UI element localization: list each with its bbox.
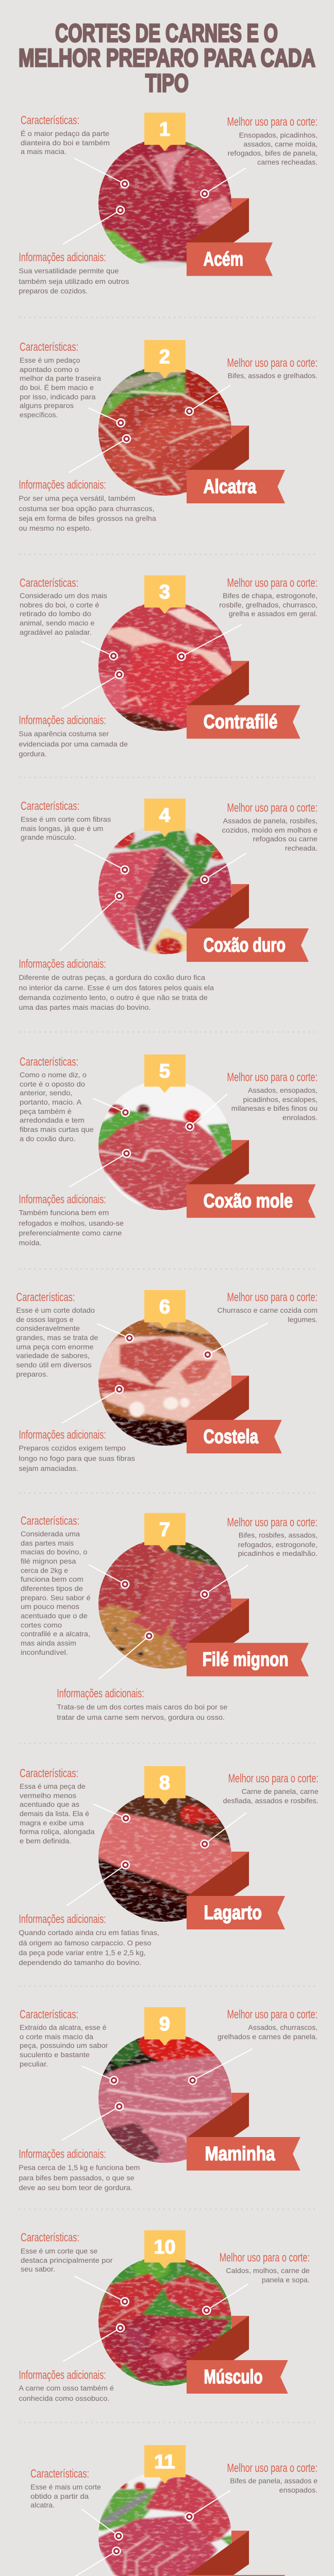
text: melhor uso [223, 1772, 319, 1805]
text: características: o corte mais macio da [20, 2032, 93, 2041]
text: melhor uso: Carne de panela, carne [242, 1787, 319, 1795]
ribbon: name: Costela [204, 1426, 259, 1448]
text: informações: Informações adicionais: [19, 957, 106, 971]
text: características: das partes mais [21, 1539, 74, 1547]
text: características: fibras mais curtas que [20, 1125, 94, 1133]
text: características: corte é o oposto do [20, 1080, 85, 1088]
text: características: vermelho menos [20, 1791, 76, 1800]
text: características: forma roliça, alongada [20, 1827, 95, 1836]
text: características [16, 1290, 98, 1378]
text: informações [19, 714, 128, 758]
callout lines [89, 1565, 248, 1679]
text: informações [57, 1687, 228, 1721]
text: melhor uso: legumes. [288, 1315, 318, 1324]
ribbon: name: Coxão duro [204, 935, 286, 956]
ribbon back [188, 2093, 249, 2137]
panel: corte 3 Contrafilé [19, 575, 318, 758]
number badge: 9 [159, 2013, 170, 2035]
number badge: 7 [159, 1519, 170, 1541]
text: informações: para bifes bem passados, o que se [19, 2174, 135, 2182]
photo: coxão mole meat [98, 1083, 231, 1210]
text: informações: também seja utilizado em outros [19, 277, 129, 285]
ribbon: name [187, 1643, 309, 1676]
text: características: preparos. [16, 1370, 48, 1378]
panel: corte 1 Acém [19, 113, 318, 295]
text: características: agradável ao paladar. [20, 628, 92, 636]
text: melhor uso: grelha e assados em geral. [229, 609, 318, 618]
number badge [144, 1766, 186, 1804]
text: melhor uso: desfiada, assados e rosbifes. [223, 1797, 319, 1805]
text: características: um pouco menos [21, 1602, 79, 1611]
text: melhor uso [227, 1071, 318, 1122]
panel: corte 11 Patinho [19, 2445, 318, 2576]
ribbon: name: Acém [204, 249, 243, 270]
ribbon: name: Contrafilé [204, 711, 277, 733]
ribbon back [188, 2531, 249, 2575]
callout lines [62, 624, 242, 708]
text: informações: Pesa cerca de 1,5 kg e funciona bem [19, 2163, 140, 2172]
number badge: 1 [159, 119, 170, 141]
ribbon back [188, 884, 249, 928]
callout lines [62, 1323, 268, 1423]
text: características [21, 2231, 113, 2273]
number badge [144, 2007, 186, 2045]
text: melhor uso: Bifes, assados e grelhados. [228, 371, 318, 380]
text: características: peça também é [20, 1107, 72, 1115]
text: informações: Trata-se de um dos cortes mais caros do boi por se [57, 1703, 228, 1711]
text: características: diferentes tipos de [21, 1584, 83, 1592]
text: informações: costuma ser boa opção para churrascos, [19, 504, 155, 513]
text: características: apontado como o [20, 365, 79, 374]
text: características: melhor da parte traseira [20, 374, 101, 382]
text: informações: gordura. [19, 750, 47, 758]
photo: coxão duro meat [98, 829, 231, 954]
text: informações: dá origem ao famoso carpaccio. O peso [19, 1939, 152, 1947]
text: características: consideravelmente [16, 1324, 80, 1332]
text: características: Esse é um corte que se [21, 2247, 98, 2255]
panel: corte 9 Maminha [19, 2007, 318, 2192]
text: informações: no interior da carne. Esse é um dos fatores pelos quais ela [19, 984, 214, 992]
text: características: arredondada e tem [20, 1116, 85, 1124]
ribbon: name [187, 2575, 285, 2576]
text: características: Considerada uma [21, 1530, 80, 1538]
panel: corte 4 Coxão duro [19, 799, 318, 1011]
text: características: Características: [21, 799, 79, 812]
number badge: 4 [159, 805, 170, 826]
callout lines [62, 2049, 253, 2140]
text: características: destaca principalmente por [21, 2256, 113, 2264]
callout lines [66, 1804, 246, 1906]
text: características [20, 1766, 95, 1845]
text: informações [19, 1193, 124, 1247]
ribbon: name: Músculo [204, 2366, 263, 2388]
panel: corte 5 Coxão mole [19, 1055, 318, 1247]
text: informações: Sua aparência costuma ser [19, 730, 109, 738]
text: características: específicos. [20, 411, 58, 419]
ribbon: name [187, 1420, 282, 1453]
text: características: suculento e bastante [20, 2050, 90, 2059]
text: características: preparo. Seu sabor é [21, 1594, 91, 1602]
text: informações: ou mesmo no espeto. [19, 524, 92, 532]
number badge: 6 [159, 1296, 170, 1318]
text: informações: Informações adicionais: [19, 1912, 106, 1925]
panel: corte 7 Filé mignon [21, 1513, 318, 1721]
text: informações: refogados e molhos, usando-se [19, 1219, 124, 1227]
text: melhor uso: Churrasco e carne cozida com [218, 1306, 318, 1314]
number badge: 2 [159, 346, 170, 368]
text: características: peculiar. [20, 2060, 48, 2068]
ribbon: name: Alcatra [204, 476, 257, 498]
text: informações [19, 250, 129, 295]
ribbon: name [187, 705, 300, 739]
text: melhor uso: picadinhos e medalhão. [238, 1549, 318, 1557]
text: melhor uso: enrolados. [282, 1113, 318, 1122]
text: melhor uso: refogados, bifes de panela, [228, 149, 318, 157]
text: melhor uso [222, 801, 318, 852]
ribbon back [188, 1376, 249, 1420]
text: informações: moída. [19, 1239, 42, 1247]
text: características: Esse é um pedaço [20, 356, 80, 364]
text: melhor uso [218, 2007, 318, 2041]
text: melhor uso [227, 115, 318, 166]
text: características: seu sabor. [21, 2265, 55, 2273]
text: características: macias do bovino, o [21, 1548, 88, 1556]
text: informações: Sua versatilidade permite que [19, 267, 119, 275]
text: características: do boi. É bem macio e [20, 383, 94, 392]
text: características: variedade de sabores, [16, 1351, 90, 1360]
text: características: peça, possuindo um sabor [20, 2041, 108, 2049]
text: características: funciona bem com [21, 1575, 84, 1583]
text: informações: Informações adicionais: [19, 2368, 106, 2382]
number badge [144, 2445, 186, 2483]
photo: maminha meat [98, 2036, 231, 2163]
text: melhor uso: refogados ou carne [253, 835, 318, 843]
text: características: Características: [21, 1514, 79, 1527]
text: melhor uso: milanesas e bifes finos ou [231, 1104, 318, 1112]
text: melhor uso: grelhados e carnes de panela. [218, 2032, 318, 2041]
text: melhor uso [218, 1290, 318, 1324]
text: características: grandes, mas se trata de [16, 1333, 98, 1342]
text: características: Características: [21, 113, 79, 127]
ribbon: name [187, 243, 273, 276]
ribbon back [188, 661, 249, 705]
photo: contrafilé meat [98, 604, 231, 731]
number badge [144, 1513, 186, 1551]
text: características [20, 1055, 94, 1143]
number badge: 3 [159, 582, 170, 603]
text: melhor uso [227, 2461, 318, 2494]
text: informações: seja em forma de bifes grossos na grelha [19, 514, 156, 522]
text: características: mas ainda assim [21, 1639, 76, 1647]
photo: músculo meat [98, 2259, 231, 2386]
text: informações: Preparos cozidos exigem tempo [19, 1444, 126, 1452]
photo: acém meat [98, 141, 231, 265]
text: características: magra e exibe uma [20, 1819, 84, 1827]
ribbon back [188, 426, 249, 470]
number badge [144, 340, 186, 378]
text: informações: dependendo do tamanho do bovino. [19, 1958, 141, 1967]
text: informações: tratar de uma carne sem nervos, gordura ou osso. [57, 1713, 225, 1721]
text: características: cerca de 2kg e [21, 1566, 68, 1574]
text: características: Esse é mais um corte [30, 2483, 101, 2491]
text: características: inconfundível. [21, 1648, 68, 1656]
text: características: demais da lista. Ela é [20, 1809, 89, 1818]
text: características [20, 340, 101, 419]
text: informações: Quando cortado ainda cru em fatias finas, [19, 1928, 159, 1937]
text: características: Características: [20, 1055, 78, 1069]
text: características: Características: [16, 1290, 75, 1303]
photo: patinho meat [98, 2474, 231, 2576]
text: características: grande músculo. [21, 833, 76, 841]
text: informações: Informações adicionais: [19, 478, 106, 492]
text: características: Como o nome diz, o [20, 1071, 87, 1079]
text: melhor uso: rosbife, grelhados, churrasco, [219, 601, 318, 609]
text: informações: da peça pode variar entre 1,5 e 2,5 kg, [19, 1948, 146, 1957]
text: informações [19, 1428, 135, 1472]
text: características: filé mignon pesa [21, 1557, 76, 1565]
text: melhor uso [220, 2251, 310, 2284]
text: informações [19, 478, 156, 532]
text: características: anterior, sendo, [20, 1089, 72, 1097]
ribbon: name: Lagarto [204, 1902, 262, 1924]
number badge [144, 799, 186, 837]
text: características: Características: [21, 2231, 79, 2244]
title [19, 20, 315, 97]
ribbon: name [187, 1184, 315, 1218]
text: características: Essa é uma peça de [20, 1782, 86, 1790]
text: características: É o maior pedaço da parte [21, 129, 109, 138]
text: características: acentuado que as [20, 1800, 79, 1808]
text: características [20, 2007, 108, 2068]
text: informações [19, 957, 214, 1011]
callout lines [63, 2276, 248, 2362]
text: características: contrafilé e a alcatra, [21, 1630, 90, 1638]
ribbon: name [187, 2137, 300, 2171]
text: características: dianteira do boi e também [21, 139, 110, 147]
ribbon: name: Maminha [205, 2143, 275, 2165]
text: informações: longo no fogo para que suas fibras [19, 1454, 135, 1462]
ribbon back [188, 1140, 249, 1184]
text: informações: Informações adicionais: [19, 250, 106, 264]
text: melhor uso [219, 576, 318, 618]
panel: corte 2 Alcatra [19, 340, 318, 532]
text: informações [19, 1912, 159, 1967]
text: informações: Informações adicionais: [19, 1193, 106, 1206]
number badge: 11 [154, 2451, 175, 2473]
text: melhor uso: Bifes de panela, assados e [230, 2477, 318, 2485]
text: características: Características: [20, 576, 78, 589]
callout lines [69, 385, 231, 472]
text: características [21, 1514, 91, 1656]
text: informações: Diferente de outras peças, a gordura do coxão duro fica [19, 973, 205, 981]
photo: filé mignon meat [98, 1542, 231, 1669]
number badge [144, 575, 186, 614]
text: características [21, 799, 111, 841]
text: características: portanto, macio. A [20, 1098, 82, 1106]
text: melhor uso: Bifes de chapa, estrogonofe, [223, 591, 318, 600]
text: características [21, 113, 110, 156]
text: informações: uma das partes mais macias do bovino. [19, 1003, 151, 1011]
photo: lagarto meat [98, 1795, 231, 1922]
callout lines [60, 844, 246, 951]
text: informações: Por ser uma peça versátil, também [19, 494, 135, 502]
number badge [144, 1290, 186, 1328]
photo: alcatra meat [98, 369, 231, 496]
text: informações: sejam amaciadas. [19, 1464, 78, 1472]
text: informações: Informações adicionais: [19, 714, 106, 727]
text: informações: deve ao seu bom teor de gordura. [19, 2183, 132, 2192]
ribbon back [188, 1599, 249, 1643]
text: melhor uso: Assados, ensopados, [248, 1086, 318, 1094]
ribbon: name [187, 470, 285, 503]
text: informações: evidenciada por uma camada de [19, 740, 128, 748]
text: melhor uso: Bifes, rosbifes, assados, [239, 1531, 318, 1539]
text: informações: preparos de cozidos. [19, 286, 88, 295]
text: características: Esse é um corte dotado [16, 1306, 95, 1314]
text: características: obtido a partir da [30, 2492, 89, 2500]
text: melhor uso [227, 1516, 318, 1557]
text: informações: conhecida como ossobuco. [19, 2394, 109, 2402]
text: características: a do coxão duro. [20, 1134, 76, 1143]
text: características: uma peça com enorme [16, 1343, 94, 1351]
text: melhor uso: cozidos, moído em molhos e [222, 826, 318, 834]
ribbon back [188, 2316, 249, 2360]
number badge [144, 1055, 186, 1093]
text: melhor uso: recheada. [285, 844, 318, 852]
text: características: Características: [20, 2007, 78, 2021]
ribbon back [188, 198, 249, 243]
text: melhor uso: refogados, estrogonofe, [238, 1540, 318, 1549]
number badge: 5 [159, 1061, 170, 1082]
callout lines [69, 1094, 227, 1187]
text: características: animal, sendo macio e [20, 619, 95, 627]
text: características: alguns preparos [20, 401, 74, 410]
text: características: Características: [30, 2467, 89, 2480]
text: características: mais longas, já que é um [21, 824, 103, 833]
text: características [30, 2467, 101, 2509]
text: informações: preferencialmente como carne [19, 1229, 122, 1237]
text: melhor uso: picadinhos, escalopes, [243, 1095, 318, 1104]
text: melhor uso: ensopados. [279, 2486, 318, 2494]
text: características: nobres do boi, o corte é [20, 601, 99, 609]
text: melhor uso: panela e sopa. [262, 2276, 310, 2284]
text: características: retirado do lombo do [20, 609, 91, 618]
ribbon: name [187, 2360, 288, 2394]
text: características: sendo útil em diversos [16, 1361, 92, 1369]
text: informações [19, 2368, 114, 2402]
ribbon: name: Coxão mole [204, 1191, 293, 1212]
ribbon back [188, 1852, 249, 1896]
text: características: Esse é um corte com fibras [21, 815, 111, 823]
text: informações: Informações adicionais: [19, 2147, 106, 2161]
title: TIPO [145, 70, 189, 97]
number badge [144, 113, 186, 151]
text: melhor uso: Assados, churrascos, [248, 2023, 318, 2031]
text: informações: demanda cozimento lento, o outro é que não se trata de [19, 993, 208, 1002]
callout lines [66, 2490, 231, 2576]
panel: corte 8 Lagarto [19, 1766, 319, 1967]
ribbon: name [187, 1896, 285, 1929]
text: características: cortes como [21, 1621, 62, 1629]
text: melhor uso [227, 356, 318, 380]
text: características [20, 576, 107, 636]
text: melhor uso: assados, carne moída, [243, 140, 318, 148]
text: características: Características: [20, 1766, 78, 1780]
ribbon: name: Filé mignon [203, 1649, 289, 1671]
ribbon: name [187, 928, 309, 962]
text: características: de ossos largos e [16, 1315, 74, 1324]
photo: costela meat [98, 1319, 231, 1446]
text: características: Considerado um dos mais [20, 591, 107, 600]
text: melhor uso: Caldos, molhos, carne de [226, 2266, 310, 2275]
number badge [144, 2230, 186, 2269]
number badge: 8 [159, 1772, 170, 1794]
text: características: a mais macia. [21, 147, 66, 156]
panel: corte 6 Costela [16, 1290, 318, 1472]
number badge: 10 [154, 2236, 176, 2258]
text: informações: Informações adicionais: [57, 1687, 144, 1700]
text: melhor uso: Ensopados, picadinhos, [239, 131, 318, 139]
callout lines [63, 158, 246, 244]
text: melhor uso: carnes recheadas. [257, 158, 318, 166]
text: características: acentuado que o de [21, 1612, 88, 1620]
text: características: e bem definida. [20, 1837, 71, 1845]
text: características: alcatra. [30, 2501, 55, 2509]
text: características: Características: [20, 340, 78, 353]
text: informações: Informações adicionais: [19, 1428, 106, 1441]
text: características: Extraído da alcatra, esse é [20, 2023, 107, 2031]
panel: corte 10 Músculo [19, 2230, 310, 2402]
text: melhor uso: Assados de panela, rosbifes, [223, 817, 318, 825]
text: informações: Também funciona bem em [19, 1209, 109, 1217]
text: informações: A carne com osso também é [19, 2384, 114, 2392]
text: informações [19, 2147, 140, 2192]
text: características: por isso, indicado para [20, 393, 96, 401]
